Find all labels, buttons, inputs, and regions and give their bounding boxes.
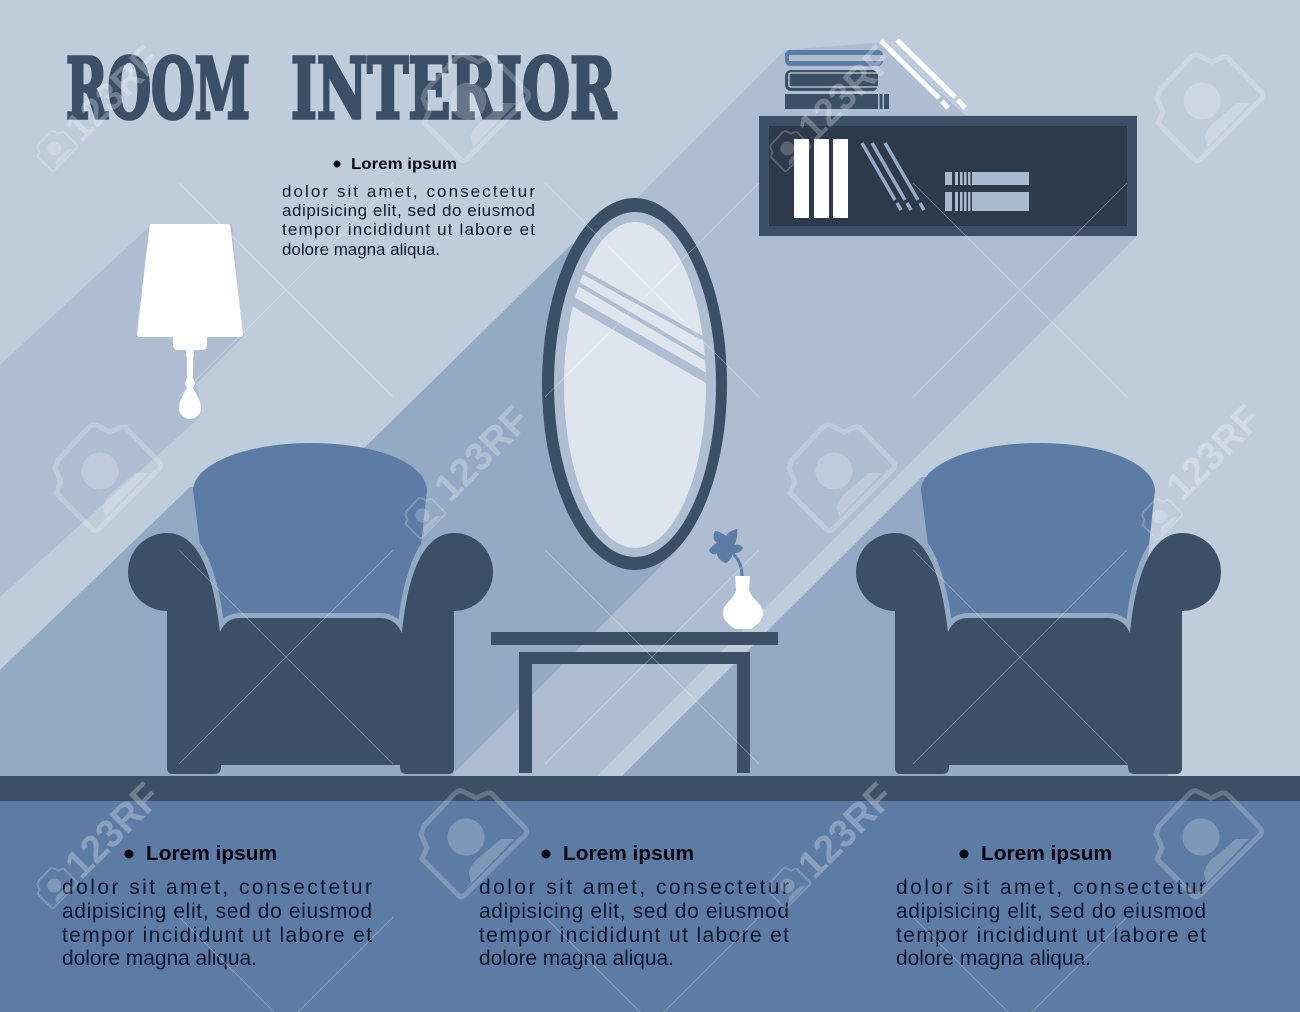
shadow: lamp xyxy=(0,224,243,597)
text block: bottom left xyxy=(62,843,372,970)
chair back outline xyxy=(200,544,421,633)
body text: dolor sit amet, consectetur xyxy=(896,876,1206,899)
chair back xyxy=(193,443,427,640)
icon: wall lamp xyxy=(137,224,243,419)
flower xyxy=(709,529,743,563)
chair body xyxy=(856,533,1221,774)
bullet xyxy=(960,850,968,858)
shadow: left armchair xyxy=(0,487,202,776)
icon: vase with flower xyxy=(709,529,763,629)
armchair: left xyxy=(128,443,493,774)
book: middle dark xyxy=(785,70,878,91)
floor skirting xyxy=(0,776,1300,801)
mirror inner rim xyxy=(554,212,716,557)
book: bottom dark xyxy=(785,94,889,109)
watermark logos: 123RF xyxy=(426,398,538,510)
wall shelf xyxy=(759,116,1137,236)
title word: interior: INTERIOR xyxy=(291,40,616,138)
heading: Lorem ipsum xyxy=(563,843,694,865)
bullet xyxy=(124,850,134,858)
long shadows on the wall xyxy=(0,42,1168,776)
lamp stem and drop xyxy=(179,350,201,419)
watermark cross lines xyxy=(179,183,1127,1012)
chair body xyxy=(128,533,493,774)
body text: dolor sit amet, consectetur xyxy=(282,182,535,201)
body text: tempor incididunt ut labore et xyxy=(282,220,535,239)
heading: Lorem ipsum xyxy=(146,843,277,865)
watermark logos xyxy=(57,38,1270,887)
armchair: right xyxy=(856,443,1221,774)
watermark small stamps xyxy=(37,131,1182,908)
heading: Lorem ipsum xyxy=(351,156,457,173)
body text: adipisicing elit, sed do eiusmod xyxy=(282,201,535,220)
shadow: shelf and books xyxy=(452,42,1137,776)
wall background xyxy=(0,0,1300,776)
mirror glass xyxy=(564,222,706,548)
mirror reflection stripes xyxy=(573,270,706,383)
icon: oval mirror xyxy=(542,198,727,570)
table top xyxy=(491,632,778,645)
body text: dolor sit amet, consectetur xyxy=(62,876,372,899)
title xyxy=(66,40,616,138)
body text xyxy=(62,876,372,970)
stacked books on shelf xyxy=(945,172,1029,211)
coffee table xyxy=(491,632,778,773)
text block: top xyxy=(282,156,535,259)
mirror frame xyxy=(542,198,727,570)
chair back outline xyxy=(928,544,1149,633)
body text: adipisicing elit, sed do eiusmod xyxy=(896,900,1206,923)
chair back xyxy=(921,443,1155,640)
title word: room: ROOM xyxy=(66,40,250,138)
bullet xyxy=(334,160,340,168)
body text: tempor incididunt ut labore et xyxy=(479,924,789,947)
shadow: mirror xyxy=(364,243,676,776)
shelf inner xyxy=(769,126,1127,226)
watermark logos: 123RF xyxy=(790,775,902,887)
shelf frame xyxy=(759,116,1137,236)
heading: Lorem ipsum xyxy=(981,843,1112,865)
text block: bottom right xyxy=(896,843,1206,970)
watermark logos: 123RF xyxy=(1158,397,1270,509)
books stack on shelf xyxy=(785,40,965,109)
body text xyxy=(282,182,535,259)
watermark stamps xyxy=(55,55,1262,897)
body text: dolore magna aliqua. xyxy=(479,947,674,970)
body text: dolore magna aliqua. xyxy=(62,947,257,970)
watermark logos: 123RF xyxy=(57,38,169,150)
white upright books xyxy=(794,139,848,218)
leaning white books xyxy=(881,40,965,108)
leaning books on shelf xyxy=(862,143,924,210)
body text: tempor incididunt ut labore et xyxy=(896,924,1206,947)
floor panel xyxy=(0,801,1300,1012)
body text xyxy=(896,876,1206,970)
text block: bottom centre xyxy=(479,843,789,970)
body text: dolore magna aliqua. xyxy=(896,947,1091,970)
body text: dolor sit amet, consectetur xyxy=(479,876,789,899)
body text: adipisicing elit, sed do eiusmod xyxy=(479,900,789,923)
lamp collar xyxy=(173,337,207,350)
flower stem xyxy=(731,552,742,576)
vase xyxy=(723,576,763,629)
body text: dolore magna aliqua. xyxy=(282,240,440,259)
shadow: right armchair xyxy=(622,477,1168,776)
body text xyxy=(479,876,789,970)
body text: adipisicing elit, sed do eiusmod xyxy=(62,900,372,923)
watermark logos: 123RF xyxy=(790,38,902,150)
bullet xyxy=(542,850,550,858)
book: top blue xyxy=(785,50,883,66)
watermark logos: 123RF xyxy=(57,775,169,887)
body text: tempor incididunt ut labore et xyxy=(62,924,372,947)
table frame xyxy=(519,652,750,773)
lamp shade xyxy=(137,224,243,337)
